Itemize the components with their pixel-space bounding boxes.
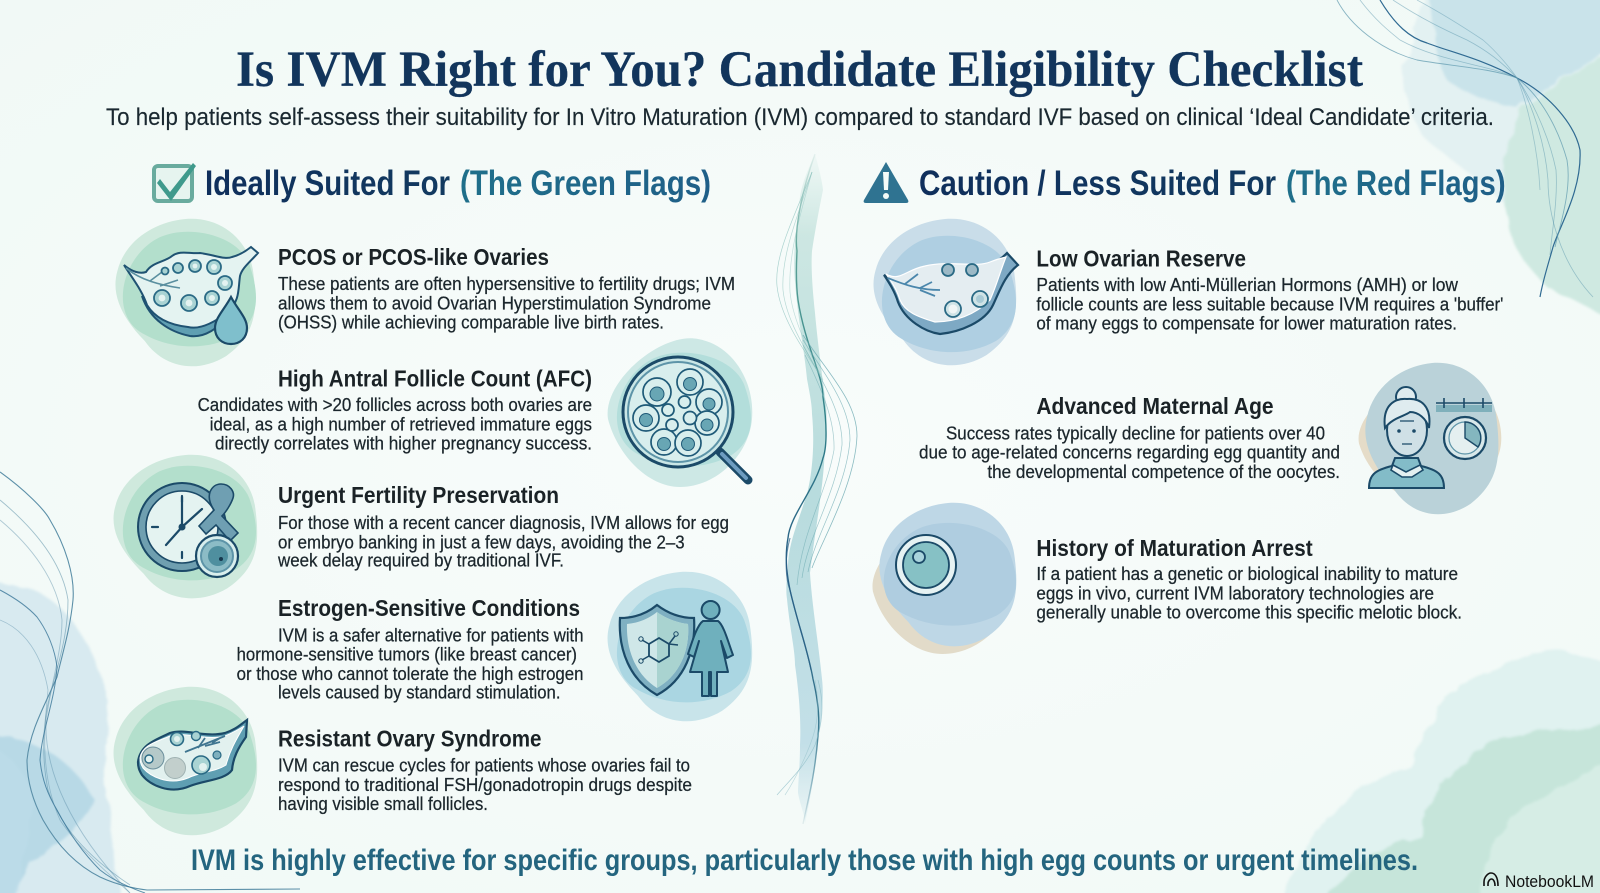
body text: eggs in vivo, current IVM laboratory technologies are: [1036, 582, 1434, 603]
panel: red flags: [864, 162, 1506, 654]
body text: follicle counts are less suitable because IVM requires a 'buffer': [1036, 293, 1503, 314]
body text: week delay required by traditional IVF.: [277, 550, 564, 571]
icon: older woman with clock: [1359, 363, 1501, 514]
body text: Patients with low Anti-Müllerian Hormons (AMH) or low: [1036, 274, 1459, 295]
body text: the developmental competence of the oocytes.: [987, 461, 1340, 482]
icon: oocyte: [872, 503, 1016, 654]
central divider ribbon: [777, 154, 857, 824]
icon: warning triangle: [864, 162, 908, 203]
item: advanced maternal age: [919, 363, 1501, 514]
body text: hormone-sensitive tumors (like breast cancer): [237, 644, 577, 665]
red flags heading: Caution / Less Suited For: [919, 164, 1276, 203]
heading: Advanced Maternal Age: [1036, 393, 1274, 419]
icon: shield and woman: [608, 572, 752, 721]
icon: ovary with droplet: [115, 219, 258, 366]
body text: [1036, 274, 1503, 334]
body text: respond to traditional FSH/gonadotropin drugs despite: [278, 774, 692, 795]
icon: notebook arcs: [1484, 873, 1498, 886]
green flags heading: Ideally Suited For: [205, 164, 450, 203]
item: estrogen-sensitive conditions: [237, 572, 752, 721]
body text: For those with a recent cancer diagnosis, IVM allows for egg: [278, 512, 729, 533]
NotebookLM badge: NotebookLM: [1505, 872, 1594, 891]
watercolor wash: bottom right: [1285, 650, 1600, 893]
body text: [237, 624, 584, 702]
body text: allows them to avoid Ovarian Hyperstimulation Syndrome: [278, 292, 711, 313]
item: AFC: [198, 338, 752, 487]
body text: IVM is a safer alternative for patients with: [278, 624, 584, 645]
icon: checkbox: [154, 163, 196, 201]
body text: [198, 394, 592, 454]
green flags heading: [154, 163, 711, 203]
red flags heading: [864, 162, 1506, 203]
panel: green flags: [114, 163, 752, 835]
heading: PCOS or PCOS-like Ovaries: [278, 244, 549, 270]
green flags heading: (The Green Flags): [460, 164, 711, 203]
body text: [278, 755, 692, 814]
heading: Urgent Fertility Preservation: [278, 482, 559, 508]
heading: History of Maturation Arrest: [1036, 535, 1313, 561]
watercolor wash: bottom left: [0, 584, 122, 893]
body text: (OHSS) while achieving comparable live birth rates.: [278, 312, 664, 333]
watercolor wash: top right: [1403, 0, 1600, 320]
item: low ovarian reserve: [874, 219, 1503, 365]
body text: [919, 422, 1340, 482]
body text: ideal, as a high number of retrieved immature eggs: [210, 413, 592, 434]
item: PCOS: [115, 219, 735, 366]
heading: Low Ovarian Reserve: [1036, 246, 1246, 272]
body text: due to age-related concerns regarding egg quantity and: [919, 442, 1340, 463]
heading: Estrogen-Sensitive Conditions: [278, 595, 580, 621]
icon: magnifier with follicles: [608, 338, 752, 487]
body text: levels caused by standard stimulation.: [278, 681, 560, 702]
title: Is IVM Right for You? Candidate Eligibility Checklist: [236, 42, 1363, 98]
decorative swirl: top right: [1337, 0, 1593, 297]
fine lines: [777, 154, 857, 824]
body text: or embryo banking in just a few days, avoiding the 2–3: [278, 531, 685, 552]
body text: Success rates typically decline for patients over 40: [946, 422, 1325, 443]
body text: generally unable to overcome this specific melotic block.: [1036, 601, 1462, 622]
item: resistant ovary syndrome: [114, 687, 692, 835]
icon: resistant ovary: [114, 687, 257, 835]
body text: [277, 512, 729, 571]
heading: Resistant Ovary Syndrome: [278, 726, 542, 752]
decorative swirl: left: [0, 472, 300, 893]
heading: High Antral Follicle Count (AFC): [278, 366, 592, 392]
body text: or those who cannot tolerate the high estrogen: [237, 663, 584, 684]
icon: ovary with few follicles: [874, 219, 1018, 365]
body text: of many eggs to compensate for lower maturation rates.: [1036, 313, 1457, 334]
body text: Candidates with >20 follicles across both ovaries are: [198, 394, 592, 415]
body text: directly correlates with higher pregnancy success.: [215, 433, 592, 454]
item: urgent fertility preservation: [114, 455, 729, 598]
body text: If a patient has a genetic or biological inability to mature: [1036, 563, 1458, 584]
subtitle: To help patients self-assess their suitability for In Vitro Maturation (IVM) compared to standard IVF based on clinical ‘Ideal Candidate’ criteria.: [106, 104, 1494, 131]
body text: These patients are often hypersensitive to fertility drugs; IVM: [278, 273, 735, 294]
body text: having visible small follicles.: [278, 793, 488, 814]
body text: IVM can rescue cycles for patients whose ovaries fail to: [278, 755, 690, 776]
item: history of maturation arrest: [872, 503, 1462, 654]
body text: [1036, 563, 1462, 622]
body text: [278, 273, 735, 333]
red flags heading: (The Red Flags): [1286, 164, 1506, 203]
icon: clock, ribbon and egg: [114, 455, 257, 598]
